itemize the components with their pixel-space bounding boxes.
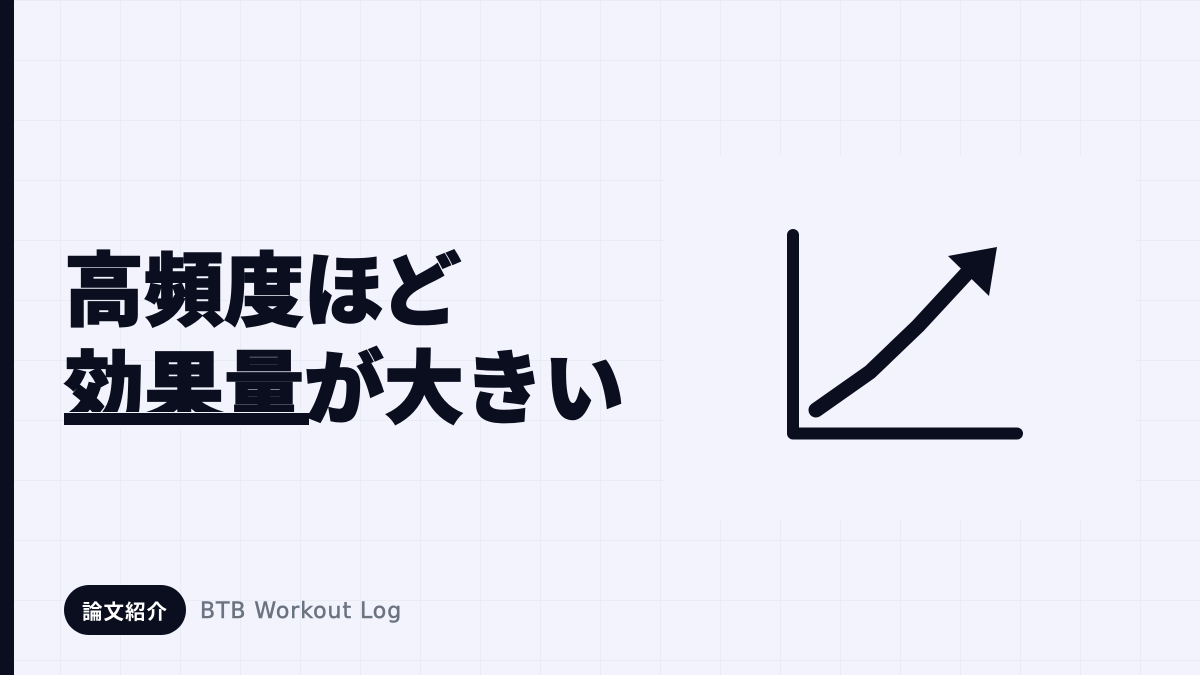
category pill: 論文紹介 <box>82 595 168 625</box>
chart axes <box>793 235 1017 434</box>
category pill <box>64 585 186 635</box>
title underline <box>64 412 309 425</box>
title <box>63 227 624 441</box>
title: 効果量が大きい <box>64 325 624 441</box>
trend line <box>816 272 968 410</box>
brand name: BTB Workout Log <box>200 599 402 624</box>
left accent bar <box>0 0 14 675</box>
icon: rising trend chart <box>787 229 1023 440</box>
title: 高頻度ほど <box>64 227 458 343</box>
arrow head <box>948 247 997 296</box>
